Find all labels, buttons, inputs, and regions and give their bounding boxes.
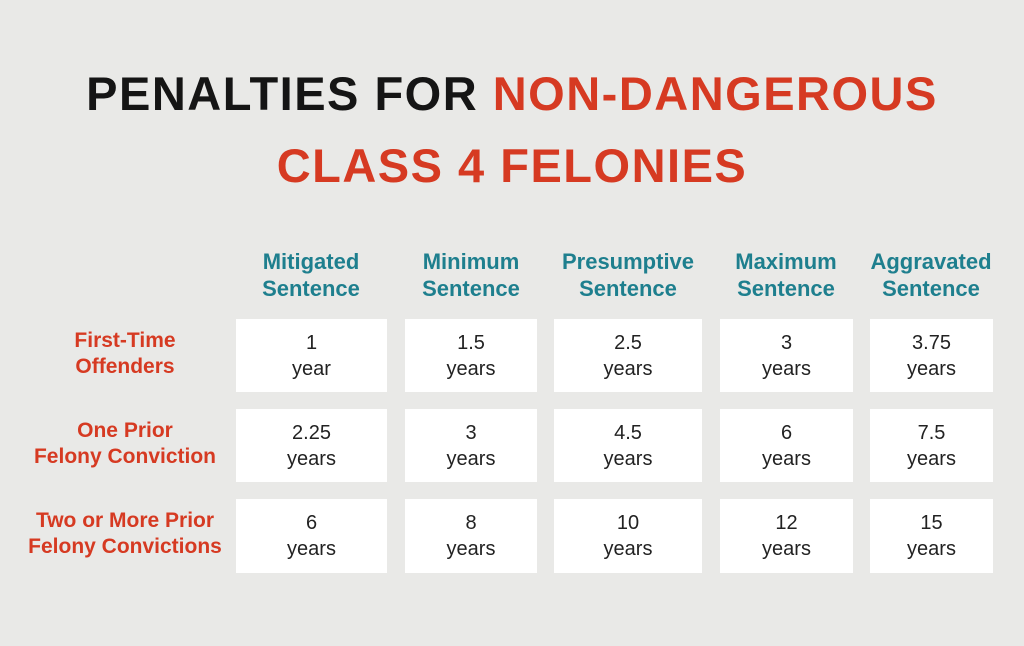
row 3 cells: 10 <box>617 512 639 534</box>
header: mitigated <box>262 249 360 301</box>
row 3 cells <box>236 499 993 573</box>
row 1 cells: years <box>907 358 956 380</box>
row label: two or more <box>28 509 222 558</box>
row 2 cells: years <box>907 448 956 470</box>
row 1 cells: 2.5 <box>614 332 642 354</box>
row 2 cells: years <box>447 448 495 470</box>
row 2 cells <box>236 409 993 482</box>
row 3 cells: 6 <box>306 512 317 534</box>
row 3 cells: 15 <box>920 512 943 534</box>
row 1 cells: 1 <box>306 332 317 354</box>
row 1 cells: year <box>292 358 331 380</box>
header: maximum: Sentence <box>737 276 835 301</box>
row 1 cells: years <box>762 358 811 380</box>
row label: one prior: One Prior <box>77 419 173 442</box>
row 1 cells <box>236 319 993 392</box>
row 1 cells: 1.5 <box>457 332 485 354</box>
row 2 cells: years <box>762 448 811 470</box>
header: presumptive: Presumptive <box>562 249 694 274</box>
header: mitigated: Mitigated <box>263 249 359 274</box>
row 3 cells: years <box>907 538 956 560</box>
row 3 cells: years <box>287 538 336 560</box>
row 3 cells: 8 <box>465 512 477 534</box>
row 1 cells: 3 <box>781 332 792 354</box>
row label: first-time: First-Time <box>74 329 176 352</box>
header: aggravated: Aggravated <box>870 249 992 274</box>
row 1 cells: years <box>604 358 652 380</box>
header: presumptive <box>562 249 694 301</box>
row label: first-time <box>74 329 176 378</box>
row 2 cells: 4.5 <box>614 422 642 444</box>
header: minimum: Minimum <box>423 249 519 274</box>
row 3 cells: years <box>447 538 495 560</box>
header: mitigated: Sentence <box>262 276 360 301</box>
row 2 cells: 3 <box>465 422 477 444</box>
row label: two or more: Felony Convictions <box>28 535 222 558</box>
title <box>86 67 938 192</box>
row 2 cells: 2.25 <box>292 422 331 444</box>
title: CLASS 4 FELONIES <box>277 139 747 192</box>
row 2 cells: years <box>287 448 336 470</box>
header: presumptive: Sentence <box>579 276 677 301</box>
row 3 cells: 12 <box>775 512 798 534</box>
row 2 cells: years <box>604 448 652 470</box>
header: maximum: Maximum <box>735 249 837 274</box>
row label: one prior: Felony Conviction <box>34 445 216 468</box>
row 3 cells: years <box>604 538 652 560</box>
header: minimum <box>422 249 520 301</box>
row label: one prior <box>34 419 216 468</box>
header: aggravated: Sentence <box>882 276 980 301</box>
row 2 cells: 6 <box>781 422 792 444</box>
row 1 cells: 3.75 <box>912 332 951 354</box>
row label: two or more: Two or More Prior <box>36 509 214 532</box>
header: aggravated <box>870 249 992 301</box>
header: minimum: Sentence <box>422 276 520 301</box>
header: maximum <box>735 249 837 301</box>
row 2 cells: 7.5 <box>918 422 945 444</box>
row 1 cells: years <box>447 358 495 380</box>
title: PENALTIES FOR NON-DANGEROUS <box>86 67 938 120</box>
row 3 cells: years <box>762 538 811 560</box>
row label: first-time: Offenders <box>75 355 175 378</box>
